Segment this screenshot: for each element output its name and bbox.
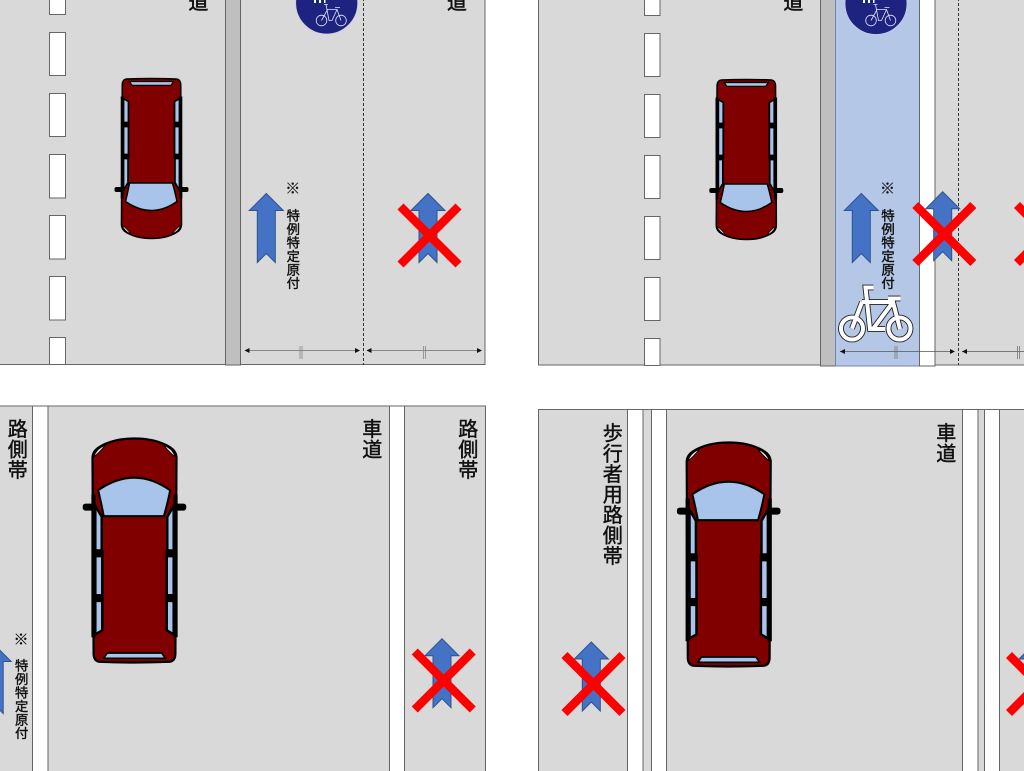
label: special moped: 例 [287,222,300,237]
label: pedestrian road shoulder: 路 [603,504,623,527]
label: pedestrian road shoulder: 行 [603,442,623,466]
icon: car [83,438,186,662]
prohibited direction cut off at edge [1009,642,1024,713]
double white lines left [628,410,666,771]
label: pedestrian road shoulder: 帯 [603,545,623,568]
label: special moped: 特 [15,658,28,674]
label: road shoulder left: 帯 [8,459,28,482]
label: special moped: 付 [15,726,28,741]
white line [920,0,935,366]
dimension lines [840,346,1024,359]
label: pedestrian road shoulder: 歩 [603,422,623,445]
panel: bottom left road [0,406,485,771]
label: road shoulder right: 路 [458,418,478,441]
icon: bicycle road sign [296,0,358,34]
road surface [0,406,486,771]
dotted lane divider [362,0,364,365]
prohibited direction [415,639,473,710]
arrow: permitted direction [249,194,283,262]
road surface [0,0,485,364]
label: road shoulder left: 路 [8,418,28,441]
road surface [538,0,1024,365]
label: pedestrian road shoulder: 用 [603,484,623,506]
label: special moped: 原 [881,262,895,278]
label: roadway: 車 [936,422,956,445]
icon: car [114,78,188,238]
label: road shoulder right: 帯 [458,459,478,482]
label: pedestrian road shoulder: 者 [603,463,623,486]
label: special moped: 原 [287,262,300,278]
label: special moped: 特 [881,236,895,250]
prohibited direction cut off at edge [1017,205,1024,263]
panel: bottom right road [538,410,1024,771]
blue bicycle lane [836,0,920,366]
arrow: permitted direction [844,194,878,262]
label: special moped: 例 [881,222,895,237]
icon: car [677,442,780,666]
panel: top left road [0,0,485,365]
label: reference mark: ※ [880,180,895,198]
median strip [226,0,240,365]
label: special moped: 定 [15,699,28,714]
label: roadway: 道 [362,438,382,461]
prohibited direction [564,642,622,713]
label: roadway: 道 [936,442,956,465]
label: special moped: 特 [287,208,300,224]
icon: bicycle lane marking [841,288,910,340]
prohibited direction [400,194,458,264]
label: special moped: 定 [287,249,300,264]
panel: top right road [538,0,1024,366]
label: special moped: 定 [881,249,895,264]
dashed lane markings [644,0,660,366]
road surface [538,410,1024,771]
icon: car [709,80,783,240]
label: road shoulder right: 側 [458,438,478,461]
white line right [390,406,404,771]
label: roadway: 車 [362,418,382,441]
label: pedestrian road shoulder: 側 [603,524,623,548]
label: road shoulder left: 側 [8,438,28,461]
double white lines right [962,410,1000,771]
white line left [32,406,48,771]
label: reference mark: ※ [13,632,29,648]
label: reference mark: ※ [285,180,300,198]
arrow: permitted direction [0,644,11,714]
label: special moped: 特 [15,686,28,700]
dashed lane markings [50,0,66,364]
label: special moped: 付 [287,276,300,291]
label: special moped: 例 [15,672,28,687]
dimension lines [244,346,482,359]
icon: bicycle road sign [845,0,907,34]
label: special moped: 付 [881,276,895,291]
label: special moped: 特 [287,236,300,250]
median strip [820,0,836,366]
prohibited direction [915,192,973,263]
dotted lane divider [958,0,960,365]
label: special moped: 原 [15,712,28,728]
label: special moped: 特 [881,208,895,224]
